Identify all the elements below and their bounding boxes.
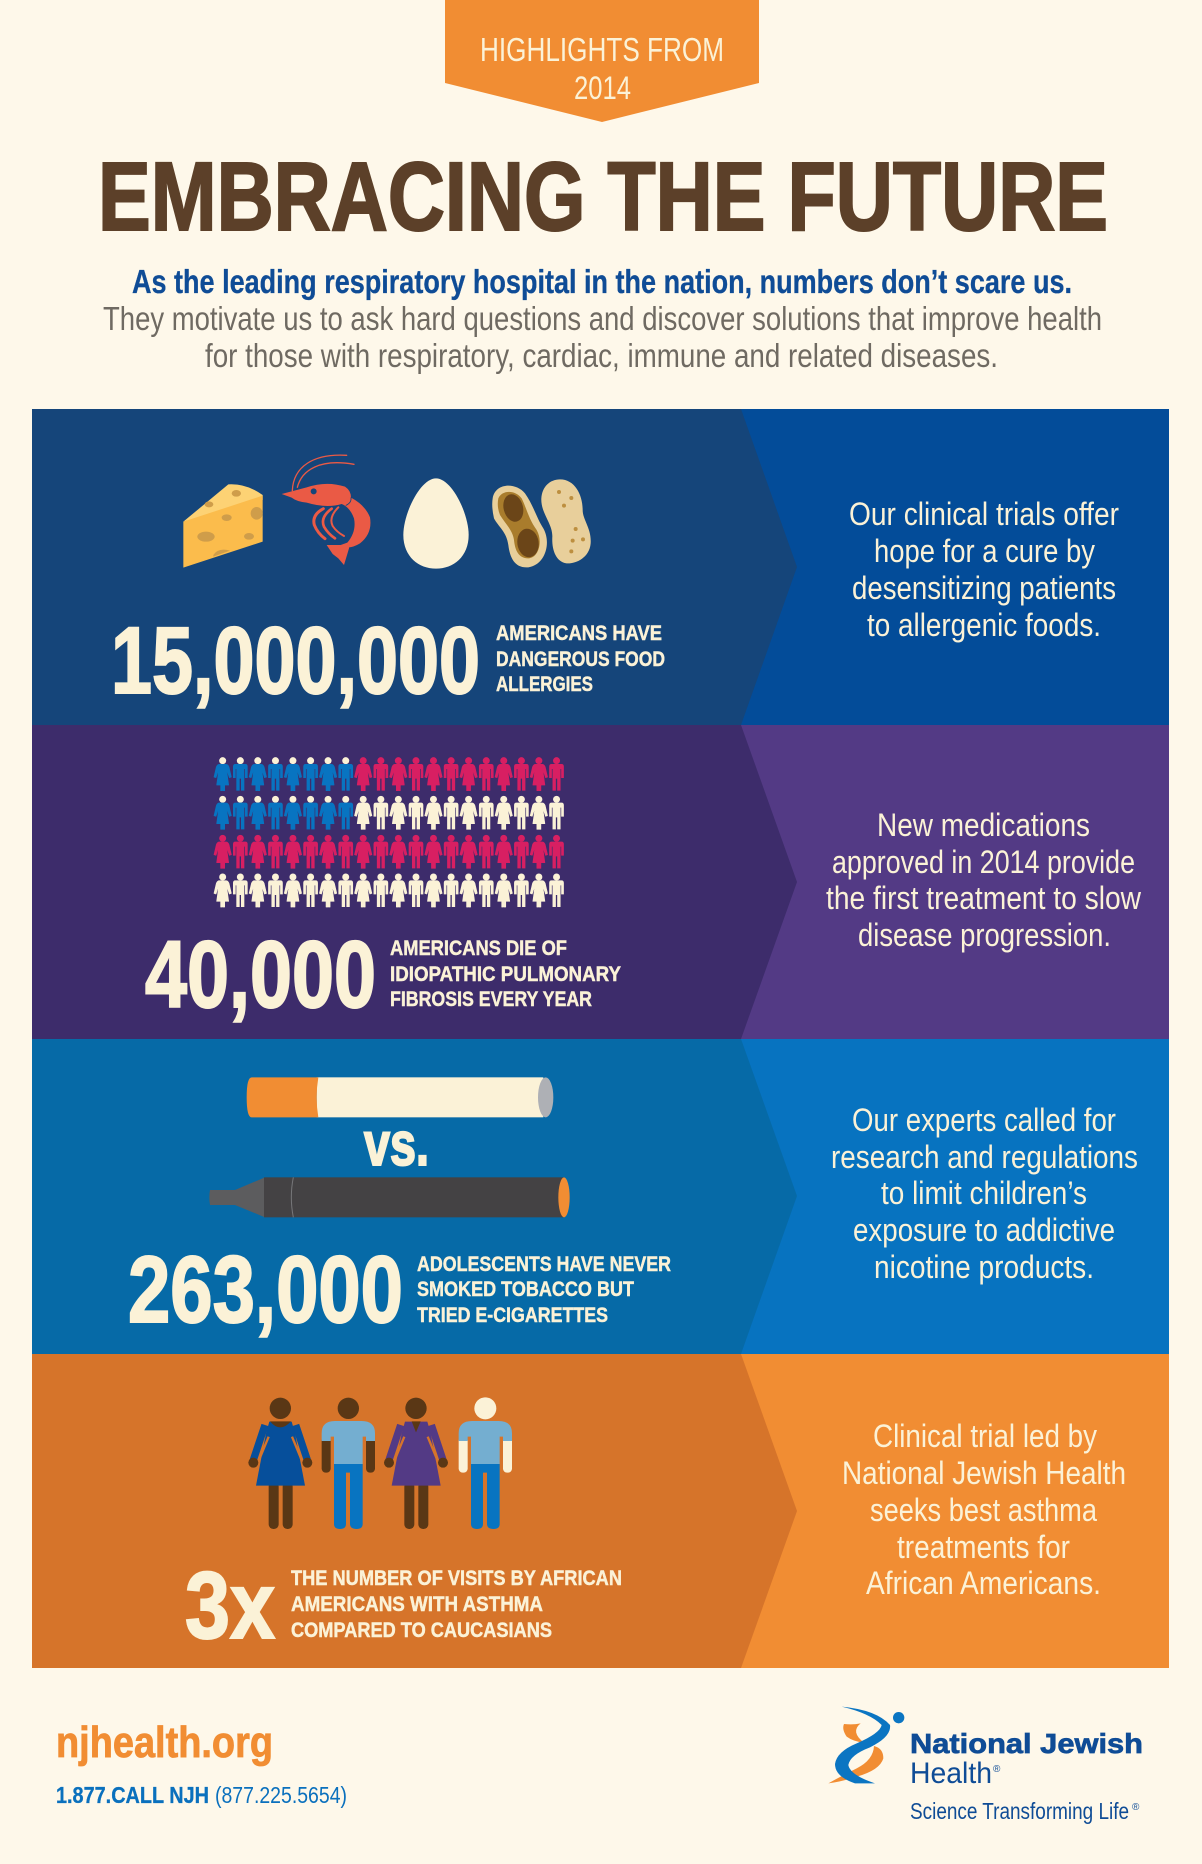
banner: highlights from 2014 (445, 0, 759, 122)
stat label: FIBROSIS EVERY YEAR (390, 988, 592, 1011)
stat: 3x: 3x (185, 1553, 275, 1659)
logo: National Jewish Health (828, 1707, 1143, 1824)
icon: e-cigarette (209, 1177, 570, 1217)
text: vs.: vs. (364, 1110, 429, 1178)
side text: disease progression. (858, 917, 1111, 953)
icon: shrimp (282, 455, 370, 565)
stat label: AMERICANS DIE OF (390, 937, 567, 960)
side text: hope for a cure by (874, 533, 1095, 569)
banner: highlights from 2014: 2014 (574, 70, 631, 106)
man with cream arms (459, 1397, 512, 1529)
stat label: DANGEROUS FOOD (496, 648, 665, 671)
side text: National Jewish Health (842, 1455, 1126, 1491)
panel: e-cigarettes (32, 1039, 1169, 1354)
side text: exposure to addictive (853, 1212, 1115, 1248)
banner: highlights from 2014: HIGHLIGHTS FROM (480, 31, 724, 68)
panel: food allergies (32, 409, 1169, 725)
logo: National Jewish Health: National Jewish (910, 1728, 1143, 1759)
footer: website: njhealth.org (56, 1718, 273, 1767)
side text: to allergenic foods. (867, 607, 1101, 643)
stat label: TRIED E-CIGARETTES (417, 1304, 608, 1327)
side text: Clinical trial led by (873, 1418, 1097, 1454)
woman in blue dress (248, 1398, 312, 1529)
stat label (496, 622, 665, 696)
side text: nicotine products. (874, 1249, 1094, 1285)
footer: phone: (877.225.5654) (215, 1782, 347, 1808)
stat: 40,000: 40,000 (145, 922, 376, 1028)
pictogram: rows of people (214, 757, 564, 907)
side text: Our clinical trials offer (849, 496, 1119, 532)
man with brown arms (322, 1398, 375, 1529)
footer: phone (56, 1782, 347, 1808)
panel: pulmonary fibrosis (32, 725, 1169, 1039)
stat label (390, 937, 621, 1011)
side text (826, 807, 1142, 953)
side text: seeks best asthma (870, 1492, 1097, 1528)
stat label: ALLERGIES (496, 673, 593, 696)
icon: cheese (183, 484, 263, 568)
stat: 263,000: 263,000 (128, 1237, 403, 1343)
logo: National Jewish Health: Science Transforming Life (910, 1798, 1129, 1824)
side text: approved in 2014 provide (832, 844, 1135, 880)
icon: peanuts (492, 479, 591, 567)
stat label: AMERICANS HAVE (496, 622, 662, 645)
side text: desensitizing patients (852, 570, 1116, 606)
intro text (103, 263, 1102, 374)
stat label (291, 1567, 622, 1642)
stat label: THE NUMBER OF VISITS BY AFRICAN (291, 1567, 622, 1590)
side text: New medications (877, 807, 1090, 843)
icon: cigarette (247, 1077, 553, 1117)
side text (842, 1418, 1126, 1601)
side text: Our experts called for (852, 1102, 1116, 1138)
intro text: for those with respiratory, cardiac, immune and related diseases. (205, 337, 998, 374)
side text: African Americans. (866, 1565, 1101, 1601)
footer: phone: 1.877.CALL NJH (56, 1782, 209, 1808)
stat label: COMPARED TO CAUCASIANS (291, 1619, 552, 1642)
logo: National Jewish Health: ® (1132, 1802, 1140, 1813)
stat label (417, 1253, 671, 1327)
side text (831, 1102, 1138, 1285)
panel: asthma disparity (32, 1354, 1169, 1668)
logo: National Jewish Health: ® (993, 1764, 1001, 1775)
side text: to limit children’s (881, 1175, 1087, 1211)
stat label: AMERICANS WITH ASTHMA (291, 1593, 543, 1616)
side text: treatments for (897, 1529, 1070, 1565)
stat label: SMOKED TOBACCO BUT (417, 1278, 634, 1301)
side text: the first treatment to slow (826, 880, 1142, 916)
logo: National Jewish Health: Health (910, 1757, 992, 1790)
side text: research and regulations (831, 1139, 1138, 1175)
icon: four people (248, 1397, 512, 1529)
side text (849, 496, 1119, 643)
stat label: ADOLESCENTS HAVE NEVER (417, 1253, 671, 1276)
icon: egg (403, 478, 469, 569)
stat label: IDIOPATHIC PULMONARY (390, 963, 621, 986)
woman in purple dress (384, 1398, 448, 1529)
stat: 15,000,000: 15,000,000 (111, 608, 480, 714)
icon: helix mark (828, 1707, 904, 1783)
